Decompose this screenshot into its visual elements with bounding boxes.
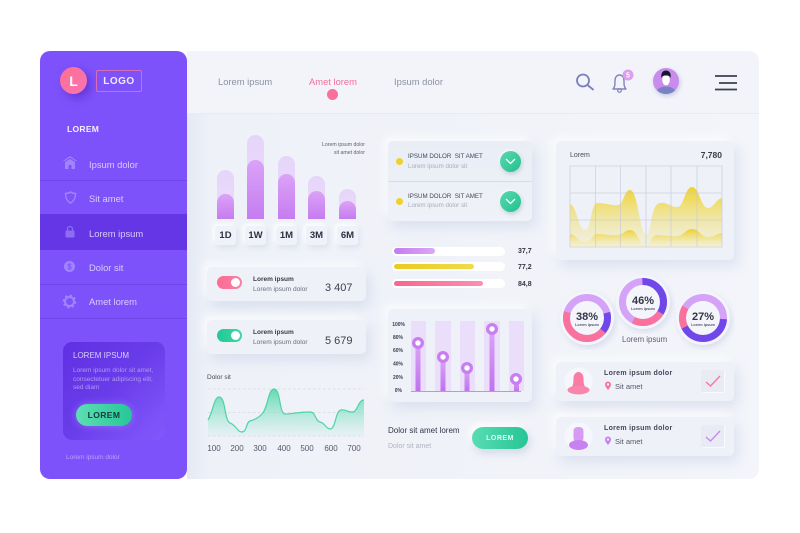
avatar: woman bbox=[568, 372, 590, 394]
chart title: Dolor sit bbox=[207, 374, 231, 381]
period tab: 1M: 1M bbox=[280, 230, 293, 241]
row subtitle: Lorem ipsum dolor sit bbox=[408, 162, 467, 170]
chart: green area: 600 bbox=[324, 444, 338, 453]
card subtitle: Lorem ipsum dolor bbox=[253, 286, 308, 293]
progress value: 84,8 bbox=[518, 280, 532, 288]
caption title: Dolor sit amet lorem bbox=[388, 426, 460, 434]
chart: lollipop bars: 20% bbox=[393, 375, 404, 381]
line chart card bbox=[556, 141, 734, 260]
donut chart: 27% bbox=[678, 294, 734, 350]
chart: green area: 100 bbox=[207, 444, 221, 453]
green button bbox=[472, 427, 528, 449]
period tab: 1M bbox=[276, 226, 297, 245]
callout title: LOREM IPSUM bbox=[73, 351, 129, 360]
icon: location pin bbox=[605, 382, 611, 390]
user location: Sit amet bbox=[615, 382, 643, 390]
progress value: 77,2 bbox=[518, 264, 532, 271]
donut group caption: Lorem ipsum bbox=[622, 335, 667, 344]
sidebar callout card bbox=[63, 342, 165, 440]
progress track purple bbox=[392, 246, 505, 256]
row subtitle: Lorem ipsum dolor sit bbox=[408, 202, 467, 209]
progress fill yellow bbox=[394, 264, 474, 269]
user name: Lorem ipsum dolor bbox=[604, 370, 672, 377]
chart label: Lorem bbox=[570, 152, 590, 159]
chart: lollipop bars: 0% bbox=[395, 388, 403, 394]
icon: search bbox=[576, 74, 594, 90]
donut chart: 46% bbox=[618, 278, 674, 334]
green toggle bbox=[217, 329, 242, 342]
logo wordmark bbox=[96, 70, 142, 92]
top navigation bar bbox=[187, 51, 759, 114]
icon: location pin bbox=[605, 436, 611, 445]
sidebar footer text: Lorem ipsum dolor bbox=[66, 454, 120, 461]
period tab: 6M: 6M bbox=[341, 230, 354, 241]
menu label: Sit amet: Sit amet bbox=[89, 193, 123, 204]
period tab: 1W: 1W bbox=[248, 230, 263, 241]
card title: Lorem ipsum bbox=[253, 276, 294, 283]
chart: lollipop bars: 80% bbox=[393, 335, 404, 341]
row title: IPSUM DOLOR SIT AMET bbox=[408, 192, 483, 200]
donut chart: 27%: 27% bbox=[692, 311, 714, 323]
donut chart: 46%: 46% bbox=[632, 295, 654, 307]
period tab: 1D: 1D bbox=[219, 230, 232, 241]
menu label: Dolor sit: Dolor sit bbox=[89, 262, 123, 273]
callout body text: consectetuer adipiscing elit, bbox=[73, 376, 153, 383]
progress fill pink bbox=[394, 281, 483, 286]
checkbox bbox=[701, 370, 724, 392]
nav item: Lorem ipsum: Lorem ipsum bbox=[218, 76, 272, 86]
list card with two rows bbox=[388, 141, 532, 221]
icon: notification bell: 5 bbox=[626, 72, 630, 80]
period tab: 3M: 3M bbox=[310, 230, 323, 241]
menu label: Amet lorem: Amet lorem bbox=[89, 296, 137, 307]
chart: green area: 700 bbox=[347, 444, 361, 453]
period tab: 1D bbox=[215, 226, 236, 245]
progress value: 37,7 bbox=[518, 248, 532, 254]
avatar: man bbox=[569, 427, 588, 450]
progress track pink bbox=[392, 279, 505, 288]
nav item: Ipsum dolor: Ipsum dolor bbox=[394, 76, 443, 86]
menu divider lines bbox=[40, 180, 187, 181]
donut chart: 38% bbox=[562, 294, 618, 350]
user name: Lorem ipsum dolor bbox=[604, 425, 672, 432]
callout button: LOREM bbox=[88, 410, 120, 420]
caption subtitle: Dolor sit amet bbox=[388, 442, 431, 450]
nav item: Amet lorem: Amet lorem bbox=[309, 76, 357, 86]
chart: lollipop bars: 60% bbox=[393, 348, 404, 354]
chart: green area: 300 bbox=[253, 444, 267, 453]
icon: gear bbox=[62, 294, 76, 308]
icon: home bbox=[63, 156, 77, 169]
donut chart: 46%: Lorem ipsum bbox=[631, 307, 656, 311]
main dashboard panel bbox=[187, 51, 759, 479]
callout body text: sed diam bbox=[73, 384, 99, 391]
user location: Sit amet bbox=[615, 436, 643, 446]
pink toggle bbox=[217, 276, 242, 289]
icon: lock bbox=[66, 226, 74, 238]
icon: user avatar bbox=[652, 68, 682, 98]
user card: pink bbox=[556, 362, 734, 401]
callout body text bbox=[73, 367, 153, 391]
donut chart: 38%: Lorem ipsum bbox=[575, 323, 600, 327]
row button bbox=[500, 190, 520, 212]
period tab: 1W bbox=[245, 226, 266, 245]
donut chart: 38%: 38% bbox=[576, 311, 598, 323]
chart note: sit amet dolor bbox=[334, 150, 365, 156]
menu heading: LOREM bbox=[67, 124, 99, 134]
progress track yellow bbox=[392, 262, 505, 271]
chart note bbox=[322, 142, 365, 156]
chart: yellow area bbox=[570, 166, 722, 248]
chart: green area: 200 bbox=[230, 444, 244, 453]
icon: dollar coin: $ bbox=[67, 262, 72, 271]
chart: lollipop bars: 100% bbox=[392, 322, 406, 328]
user card: purple bbox=[556, 417, 734, 456]
row divider bbox=[388, 180, 532, 182]
card value: 3 407 bbox=[325, 282, 353, 294]
sidebar bbox=[40, 51, 187, 479]
logo mark: L bbox=[69, 73, 78, 89]
chart: purple bars bbox=[213, 135, 360, 248]
row title: IPSUM DOLOR SIT AMET bbox=[408, 153, 483, 160]
icon: hamburger menu bbox=[715, 75, 737, 90]
icon: dollar coin bbox=[64, 261, 75, 272]
chart: green area: 500 bbox=[300, 444, 314, 453]
active menu row bbox=[40, 214, 187, 250]
period tab: 3M bbox=[306, 226, 327, 245]
chart: green area: 400 bbox=[277, 444, 291, 453]
callout button bbox=[76, 404, 132, 426]
green button: LOREM bbox=[486, 435, 514, 442]
row dot bbox=[396, 198, 403, 204]
card title: Lorem ipsum bbox=[253, 328, 294, 336]
menu label: Lorem ipsum: Lorem ipsum bbox=[89, 228, 143, 239]
logo wordmark: LOGO bbox=[103, 76, 135, 87]
chart note: Lorem ipsum dolor bbox=[322, 142, 365, 148]
chart value: 7,780 bbox=[701, 150, 722, 160]
chart: lollipop bars: 40% bbox=[393, 362, 404, 368]
chart: green area bbox=[207, 388, 364, 453]
icon: shield bbox=[64, 191, 76, 204]
chart: lollipop bars bbox=[392, 321, 524, 394]
progress fill purple bbox=[394, 248, 435, 254]
stat card: pink toggle bbox=[207, 267, 366, 301]
menu label: Ipsum dolor: Ipsum dolor bbox=[89, 159, 138, 170]
checkbox bbox=[701, 425, 724, 447]
logo mark bbox=[60, 67, 87, 94]
percentage bar chart card bbox=[388, 309, 532, 402]
card value: 5 679 bbox=[325, 334, 353, 346]
callout body text: Lorem ipsum dolor sit amet, bbox=[73, 367, 153, 374]
stat card: green toggle bbox=[207, 320, 366, 354]
period tab: 6M bbox=[337, 226, 358, 245]
card subtitle: Lorem ipsum dolor bbox=[253, 338, 308, 346]
active nav dot bbox=[327, 89, 338, 100]
row button bbox=[500, 150, 520, 172]
row dot bbox=[396, 158, 403, 164]
icon: notification bell bbox=[612, 70, 634, 93]
donut chart: 27%: Lorem ipsum bbox=[691, 323, 716, 327]
